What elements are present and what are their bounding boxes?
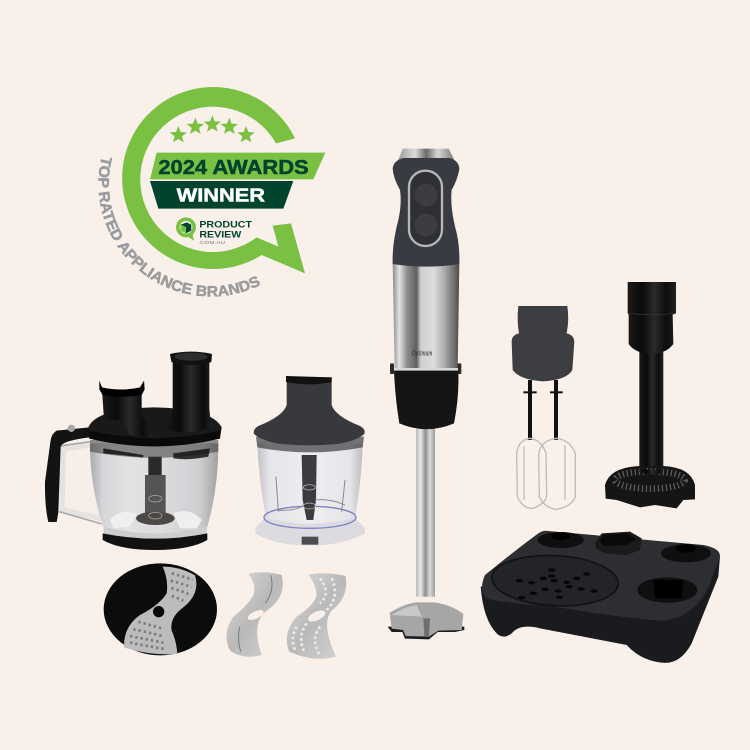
processor base (103, 533, 207, 550)
chopper rim (256, 437, 364, 452)
processor bowl (90, 443, 218, 533)
power button (415, 184, 437, 206)
masher head (628, 282, 676, 354)
steel trim (395, 368, 458, 371)
logo: product review: PRODUCT (199, 220, 253, 230)
logo: product review: REVIEW (199, 229, 242, 239)
turbo button (415, 214, 437, 236)
masher base (605, 466, 695, 508)
grater blade two (287, 573, 346, 659)
feed tube (165, 352, 213, 432)
banner: winner: WINNER (177, 185, 265, 206)
storage tray (481, 531, 720, 663)
socket front right (637, 577, 697, 603)
mini chopper (254, 376, 365, 545)
masher stem (639, 350, 663, 468)
chopper bowl (257, 443, 363, 524)
beater whisks (517, 438, 575, 509)
logo icon (176, 217, 196, 241)
brand script: Optimum (412, 348, 432, 357)
socket centre (595, 532, 642, 555)
processor stem (136, 457, 175, 525)
beater shafts (523, 380, 563, 440)
beater housing (512, 306, 574, 381)
tray top (482, 531, 720, 621)
tray holes (516, 568, 598, 599)
processor handle (45, 425, 102, 524)
award badge (98, 87, 326, 297)
masher attachment (605, 282, 695, 508)
small chute (99, 381, 153, 437)
handle grip (393, 158, 459, 267)
stick blender (390, 149, 461, 597)
badge ring speech bubble (122, 87, 305, 273)
black collar (394, 371, 458, 429)
steel body (393, 263, 459, 369)
five stars (170, 115, 255, 142)
curved caption: TOP RATED APPLIANCE BRANDS (98, 158, 260, 297)
processor lid (88, 407, 222, 446)
banner: 2024 awards (150, 153, 325, 179)
logo: product review: .COM.AU (198, 240, 225, 246)
chopper cap (254, 377, 365, 445)
body clips (390, 363, 461, 374)
top cap (398, 149, 455, 161)
processor blades (110, 511, 202, 528)
banner: 2024 awards: 2024 AWARDS (158, 157, 309, 179)
slicing disc (104, 563, 217, 655)
disc blade (124, 567, 196, 654)
socket back left (537, 532, 584, 548)
tray recess (490, 552, 620, 609)
slicer blade one (227, 572, 283, 657)
bowl top band (90, 440, 218, 458)
beater attachment (512, 306, 575, 509)
banner: winner (150, 181, 293, 209)
tray side (481, 557, 720, 663)
chopper stem (275, 455, 345, 520)
blender shaft (416, 423, 435, 597)
button panel (409, 171, 442, 246)
socket back right (661, 544, 711, 562)
food processor (45, 352, 222, 550)
chopper base (255, 513, 365, 545)
blender foot (388, 602, 464, 639)
logo: product review (176, 217, 253, 246)
